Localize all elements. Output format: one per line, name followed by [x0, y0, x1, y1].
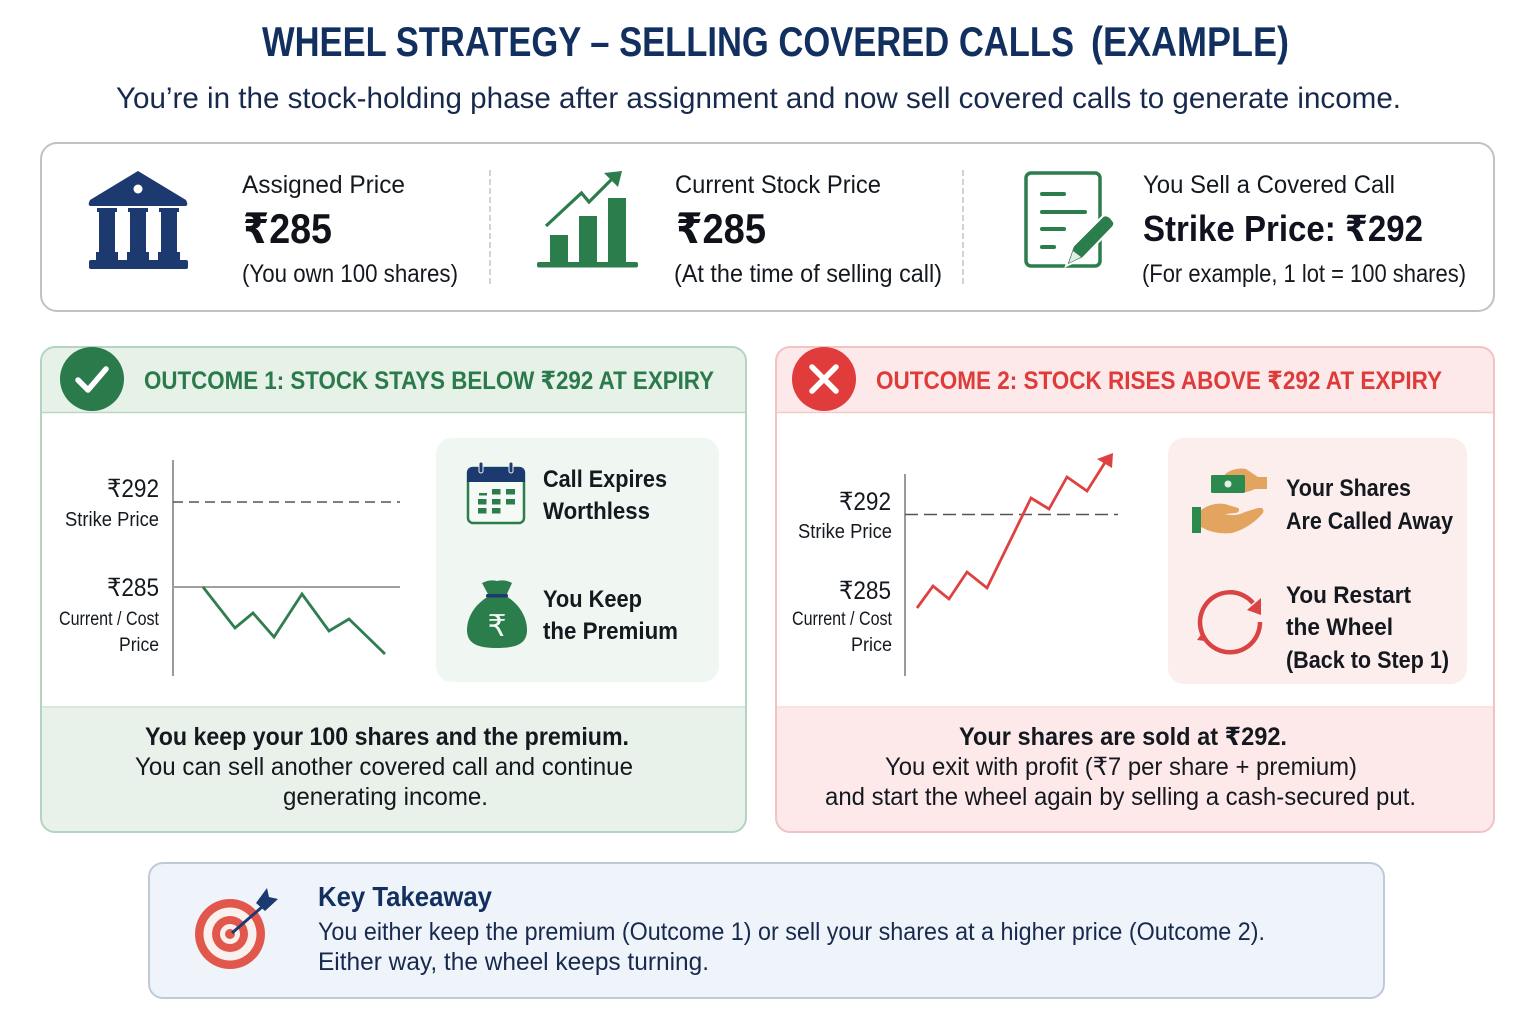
text: current stock price [674, 171, 942, 288]
panel: outcome 2 results [1168, 438, 1467, 684]
text: call expires worthless: Worthless [543, 498, 650, 525]
text: outcome 1 summary: You keep your 100 shares and the premium. [145, 723, 629, 751]
text: assigned price [242, 171, 458, 288]
text: covered call strike [1142, 171, 1466, 288]
heading: outcome 1: OUTCOME 1: STOCK STAYS BELOW ₹292 AT EXPIRY [144, 367, 714, 395]
text: takeaway body: Either way, the wheel keeps turning. [318, 948, 709, 976]
icon: rising bar chart [537, 171, 638, 268]
chart: stock stays below strike: ₹285 [107, 574, 159, 602]
icon: money bag: ₹ [487, 610, 507, 643]
text: assigned price: ₹285 [243, 205, 332, 252]
heading: outcome 2: OUTCOME 2: STOCK RISES ABOVE ₹292 AT EXPIRY [876, 367, 1442, 395]
icon: restart cycle [1197, 592, 1261, 652]
text: call expires worthless [543, 466, 667, 525]
text: shares called away: Are Called Away [1286, 508, 1454, 535]
icon: bank building [89, 171, 188, 269]
chart: stock stays below strike: Price [119, 635, 159, 656]
text: shares called away [1286, 475, 1454, 535]
text: outcome 2 summary: Your shares are sold at ₹292. [959, 723, 1287, 751]
icon: money bag [467, 580, 527, 648]
text: covered call strike: Strike Price: ₹292 [1143, 208, 1423, 249]
subtitle: You’re in the stock-holding phase after assignment and now sell covered calls to generate income. [116, 82, 1401, 115]
text: restart the wheel: the Wheel [1286, 614, 1393, 641]
chart: stock stays below strike: Current / Cost [59, 609, 160, 630]
text: shares called away: Your Shares [1286, 475, 1411, 502]
text: covered call strike: You Sell a Covered Call [1143, 171, 1395, 199]
text: current stock price: ₹285 [676, 205, 766, 252]
icon: target with arrow [195, 888, 278, 969]
text: you keep the premium: You Keep [543, 586, 642, 613]
title: (EXAMPLE) [1091, 18, 1289, 65]
text: you keep the premium [543, 586, 678, 645]
text: outcome 2 summary [825, 723, 1416, 811]
chart: stock stays below strike [59, 460, 400, 676]
text: outcome 2 summary: You exit with profit (₹7 per share + premium) [885, 753, 1357, 781]
text: restart the wheel: (Back to Step 1) [1286, 647, 1449, 674]
chart: stock rises above strike: ₹285 [839, 577, 891, 605]
icon: check badge [60, 347, 124, 411]
panel: trade setup summary [41, 143, 1494, 311]
text: covered call strike: (For example, 1 lot = 100 shares) [1142, 260, 1466, 288]
text: outcome 1 summary [135, 723, 633, 811]
panel: outcome 2 [776, 347, 1494, 832]
chart: stock stays below strike: Strike Price [65, 509, 159, 531]
text: assigned price: Assigned Price [242, 171, 405, 199]
text: current stock price: (At the time of selling call) [674, 260, 942, 288]
heading: key takeaway: Key Takeaway [318, 881, 492, 912]
text: outcome 1 summary: You can sell another covered call and continue [135, 753, 633, 781]
chart: stock rises above strike: Price [851, 635, 892, 656]
panel: outcome 1 results [436, 438, 719, 682]
text: takeaway body [318, 918, 1265, 976]
text: restart the wheel [1286, 582, 1449, 674]
chart: stock rises above strike [792, 453, 1118, 676]
text: assigned price: (You own 100 shares) [242, 260, 458, 288]
icon: hands exchanging money [1192, 469, 1267, 533]
chart: stock rises above strike: Current / Cost [792, 609, 893, 630]
icon: contract and pencil [1026, 173, 1114, 266]
icon: cross badge [792, 347, 856, 411]
text: outcome 2 summary: and start the wheel again by selling a cash-secured put. [825, 783, 1416, 811]
text: takeaway body: You either keep the premium (Outcome 1) or sell your shares at a higher price (Outcome 2). [318, 918, 1265, 946]
text: restart the wheel: You Restart [1286, 582, 1411, 609]
icon: calendar [467, 462, 525, 523]
text: you keep the premium: the Premium [543, 618, 678, 645]
panel: key takeaway [149, 863, 1384, 998]
panel: outcome 1 [41, 347, 746, 832]
chart: stock rises above strike: ₹292 [839, 488, 891, 516]
title: WHEEL STRATEGY – SELLING COVERED CALLS [262, 18, 1074, 65]
chart: stock stays below strike: ₹292 [107, 475, 159, 503]
text: call expires worthless: Call Expires [543, 466, 667, 493]
text: current stock price: Current Stock Price [675, 171, 881, 199]
chart: stock rises above strike: Strike Price [798, 521, 892, 543]
text: outcome 1 summary: generating income. [283, 783, 488, 811]
